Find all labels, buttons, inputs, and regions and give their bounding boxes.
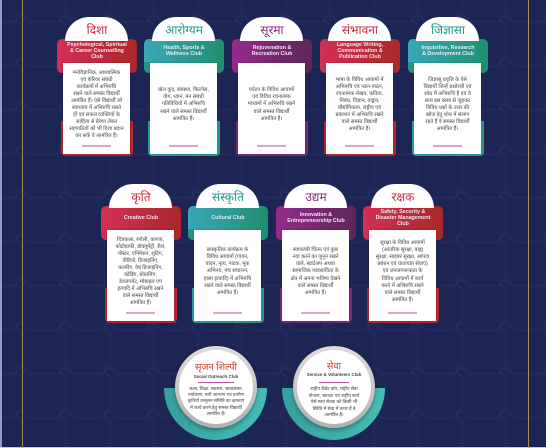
description: करने में अभिरुचि रखने xyxy=(381,283,424,289)
description xyxy=(238,63,305,154)
description: क्षेत्र में अपना भविष्य देखने xyxy=(291,276,340,282)
heading: Arogyam: आरोग्यम xyxy=(165,23,203,37)
description: आमंत्रित हैं। xyxy=(305,290,326,296)
description xyxy=(194,230,261,321)
club name: Communication & xyxy=(337,48,383,54)
heading: Srujan Shilpi: सृजन शिल्पी xyxy=(195,363,237,373)
description: रखने वाले समस्त विद्यार्थी xyxy=(160,109,207,115)
description: आमंत्रित हैं। xyxy=(437,126,458,132)
club name: Language Writing, xyxy=(337,42,383,48)
description xyxy=(282,230,349,321)
description: वाले समस्त विद्यार्थी xyxy=(385,290,420,296)
description: विविध आयामों (गायन, xyxy=(207,254,248,260)
description: आमंत्रित हैं। xyxy=(173,116,194,122)
description: विविध प्रश्नों के उत्तर की xyxy=(426,105,469,111)
description: वाले समस्त विद्यार्थी xyxy=(298,283,333,289)
description: इत्यादि में अभिरुचि रखने xyxy=(118,286,163,292)
description: सुरक्षा, साइबर सुरक्षा, आपदा xyxy=(376,254,429,260)
heading: Rakshak: रक्षक xyxy=(392,190,414,204)
ring with text xyxy=(175,346,257,428)
description: भाषा के विविध आयामों में xyxy=(336,77,383,83)
description: कोडिंग, प्रोग्रामिंग, xyxy=(124,272,157,278)
description: आमंत्रित हैं। xyxy=(392,297,413,303)
card: Rakshak xyxy=(363,184,443,323)
description: फोटोग्राफी, डॉक्यूमेंट्री, रील, xyxy=(115,244,166,250)
heading: Disha: दिशा xyxy=(87,23,107,37)
description: कर सकें वे आमंत्रित हैं। xyxy=(75,133,118,139)
description: योग, ध्यान, मन संबंधी xyxy=(163,94,204,100)
description: मनोवैज्ञानिक, आध्यात्मिक xyxy=(73,70,120,76)
description: सामाजिक व्यवसायिता के xyxy=(292,268,339,274)
club name: Health, Sports & xyxy=(163,45,205,51)
club name xyxy=(287,212,345,224)
description: विद्यार्थी जिन्हें प्रश्नोत्तरी एवं xyxy=(423,84,472,90)
club name: Publication Club xyxy=(339,54,381,60)
description: कला, शिक्षा, स्वास्थ्य, स्वावलंबन, xyxy=(189,386,243,391)
card: Disha xyxy=(57,17,137,156)
club name: & Career Counselling xyxy=(70,48,124,54)
description: शोध में अभिरुचि है एवं वे xyxy=(424,91,471,97)
description xyxy=(326,63,393,154)
description: वाले समस्त विद्यार्थी xyxy=(342,119,377,125)
heading: Kriti: कृति xyxy=(131,190,151,204)
heading: Sanskriti: संस्कृति xyxy=(212,190,244,204)
heading: Seva: सेवा xyxy=(327,362,341,372)
description: पर्यटन के विविध आयामों xyxy=(249,87,294,93)
ring with text xyxy=(293,346,375,428)
card: Jigyasa xyxy=(408,17,488,156)
description xyxy=(107,230,174,321)
description: वाले समस्त विद्यार्थी xyxy=(123,293,158,299)
club name xyxy=(163,45,205,57)
description: आमंत्रित हैं। xyxy=(206,411,226,416)
heading: Sambhavna: संभावना xyxy=(342,23,378,37)
club name xyxy=(337,42,383,60)
club name: Social Outreach Club xyxy=(194,374,238,379)
description: हास्य इत्यादि) में अभिरुचि xyxy=(204,276,251,282)
description: कार्यक्रमों में अभिरुचि xyxy=(77,84,116,90)
description: खेल कूद, स्वास्थ्य, फिटनेस, xyxy=(158,87,209,93)
description: वीडियो, डिजाइनिंग, xyxy=(122,258,158,264)
description: सुरक्षा के विविध आयामों xyxy=(380,240,425,246)
club name: Recreation Club xyxy=(252,51,292,57)
description: आमंत्रित हैं। xyxy=(217,290,238,296)
club name: Club xyxy=(91,54,103,60)
club name: Creative Club xyxy=(124,215,158,221)
card: Soorma xyxy=(232,17,312,156)
card: Kriti xyxy=(101,184,181,323)
club name: & Development Club xyxy=(422,51,474,57)
description: आमंत्रित हैं। xyxy=(349,126,370,132)
description: स्वावलंबी चिंतन एवं कुछ xyxy=(293,247,338,253)
description: योजना, स्काउट एवं राष्ट्रीय कार्य xyxy=(309,393,359,398)
description: (आंतरिक सुरक्षा, बाह्य xyxy=(382,247,423,253)
description: रखने वाले समस्त विद्यार्थी xyxy=(73,91,120,97)
club name: Inquisitive, Research xyxy=(422,45,474,51)
left edge strip xyxy=(0,0,2,448)
club name: Entrepreneurship Club xyxy=(287,218,345,224)
club name: Wellness Club xyxy=(166,51,202,57)
description: माध्यमों में अभिरुचि रखने xyxy=(248,101,295,107)
club name: Innovation & xyxy=(300,212,332,218)
club name: Rejuvenation & xyxy=(253,45,291,51)
club name xyxy=(422,45,474,57)
description: जिज्ञासु प्रवृत्ति के ऐसे xyxy=(428,77,467,83)
description: स्थिति में सेवा में तत्पर हैं वे xyxy=(313,406,355,411)
description: निबंध, विज्ञान, वाङ्मय, xyxy=(340,98,379,104)
description: खोज हेतु शोध में संलग्न xyxy=(426,112,469,118)
club name xyxy=(67,42,127,60)
description: एवं विविध रचनात्मक xyxy=(252,94,291,100)
heading: Udyam: उद्यम xyxy=(305,190,327,204)
description: प्रबंधन एवं यातायात सेवाएं) xyxy=(377,261,428,267)
description: आमंत्रित हैं। xyxy=(324,412,344,417)
card: Sambhavna xyxy=(320,17,400,156)
description: वाले समस्त विद्यार्थी xyxy=(254,109,289,115)
description: कलरिंग, वेब डिजाइनिंग, xyxy=(118,265,163,271)
right gold line xyxy=(528,0,529,448)
panel: Seva xyxy=(282,346,385,440)
description xyxy=(308,386,360,417)
description: वादन, नृत्य, नाटक, मूक xyxy=(206,261,249,267)
description: अभिनय, मंच संचालन, xyxy=(207,268,248,274)
description: नया करने का जुनून रखने xyxy=(292,254,339,260)
teal crescent xyxy=(282,388,385,440)
description: प्रकाशन में अभिरुचि रखने xyxy=(335,112,384,118)
teal crescent xyxy=(164,388,267,440)
description: एवं जनजागरूकता के xyxy=(383,268,422,274)
club name: Disaster Management xyxy=(376,215,430,221)
description: आमंत्रित हैं। xyxy=(130,300,151,306)
description xyxy=(188,386,244,416)
description: राष्ट्रीय कैडेट कोर, राष्ट्रीय सेवा xyxy=(310,386,358,391)
description xyxy=(150,63,217,154)
bottom edge strip xyxy=(0,446,546,448)
club name: Service & Volunteers Club xyxy=(307,372,361,377)
description: वाले, स्टार्टअप अथवा xyxy=(296,261,335,267)
description: प्रौद्योगिकला, राष्ट्रीय एवं xyxy=(338,105,381,111)
description: ऐसे स्वयं सेवक को किसी भी xyxy=(311,399,357,404)
club name xyxy=(376,209,430,227)
club name: Club xyxy=(397,221,409,227)
description: अभिरुचि एवं पठन-पाठन, xyxy=(336,84,383,90)
description: विविध आयामों में कार्य xyxy=(382,276,423,282)
heading: Jigyasa: जिज्ञासा xyxy=(431,23,465,37)
divider xyxy=(319,382,349,383)
description: रचनात्मक लेखन, कविता, xyxy=(336,91,383,97)
description xyxy=(369,230,436,321)
description: चित्रकला, रंगोली, कागज, xyxy=(117,237,164,243)
description: आमंत्रित हैं। ऐसे विद्यार्थी जो xyxy=(71,98,122,104)
club name: Safety, Security & xyxy=(381,209,425,215)
description: स्वाध्याय में अभिरुचि रखते xyxy=(72,105,121,111)
description: आमंत्रित हैं। xyxy=(261,116,282,122)
description: सांस्कृतिक कार्यक्रम के xyxy=(207,247,248,253)
description: रखने वाले समस्त विद्यार्थी xyxy=(204,283,251,289)
card: Sanskriti xyxy=(188,184,268,323)
description: हों एवं सफल व्यक्तियों के xyxy=(73,112,120,118)
description: सत्य इस क्लब से जुड़कर xyxy=(425,98,470,104)
description: में कार्य करने हेतु समस्त विद्यार्थी xyxy=(190,405,242,410)
description xyxy=(414,63,481,154)
description: कृतियाँ उन्मूलन समिति का क्षमताएं xyxy=(188,398,244,403)
description: साहित्य से प्रेरणा लेकर xyxy=(76,119,117,125)
panel: Srujan Shilpi xyxy=(164,346,267,440)
club name: Psychological, Spiritual xyxy=(67,42,127,48)
description: रहते हैं वे समस्त विद्यार्थी xyxy=(425,119,470,125)
card: Udyam xyxy=(276,184,356,323)
description xyxy=(63,63,130,154)
description: एवं कॅरियर संबंधी xyxy=(80,77,113,83)
club name: Cultural Club xyxy=(211,215,245,221)
card: Arogyam xyxy=(144,17,224,156)
description: डेवलपमेंट, मोबाइल एप xyxy=(119,279,162,285)
club name xyxy=(252,45,292,57)
left gold line xyxy=(22,0,23,448)
description: गतिविधियों में अभिरुचि xyxy=(162,101,205,107)
divider xyxy=(198,382,234,383)
description: पर्यावरण, नारी जागरण एवं ग्रामीण xyxy=(188,392,244,397)
heading: Soorma: सूरमा xyxy=(260,23,284,37)
description: पोस्टर, एनिमेशन, शूटिंग, xyxy=(118,251,163,257)
description: सहपाठियों को भी दिशा प्रदान xyxy=(69,126,124,132)
